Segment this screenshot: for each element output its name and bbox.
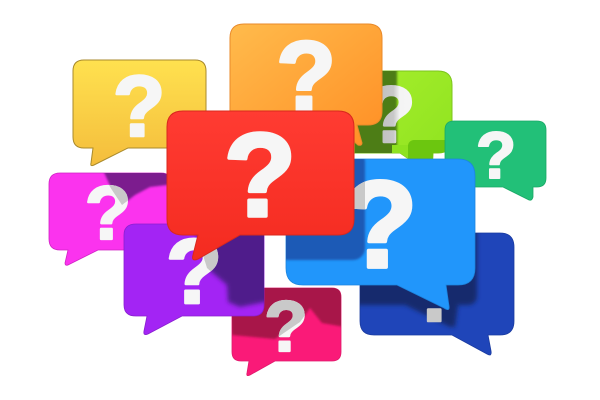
bubble: red: [167, 109, 354, 260]
bubble: purple: ?: [166, 221, 222, 323]
question mark: green: ?: [476, 118, 516, 192]
bubble: blue: ?: [342, 157, 418, 294]
question mark: dark blue: ?: [410, 244, 462, 340]
question mark: orange: ?: [276, 21, 336, 131]
bubble: pink: [228, 285, 345, 376]
bubble: magenta: ?: [85, 171, 131, 256]
question mark: purple: ?: [166, 221, 222, 323]
bubble: blue: [276, 150, 475, 310]
question mark: magenta: ?: [85, 171, 131, 256]
question mark: lime: ?: [367, 70, 415, 159]
bubble: dark blue: [355, 228, 514, 355]
bubble: yellow: [73, 59, 206, 166]
bubble: green: [445, 118, 546, 200]
bubble: magenta: [49, 170, 175, 265]
question mark: yellow: ?: [113, 59, 165, 155]
bubble: purple: [124, 221, 270, 335]
bubble: lime: [354, 70, 452, 159]
bubble: pink: ?: [264, 288, 308, 367]
question mark: pink: ?: [264, 288, 308, 367]
question mark: red: ?: [224, 109, 296, 242]
bubble: orange: [230, 21, 382, 145]
question mark: blue: ?: [342, 157, 418, 294]
illustration: colourful speech bubbles with question marks: [48, 24, 546, 376]
